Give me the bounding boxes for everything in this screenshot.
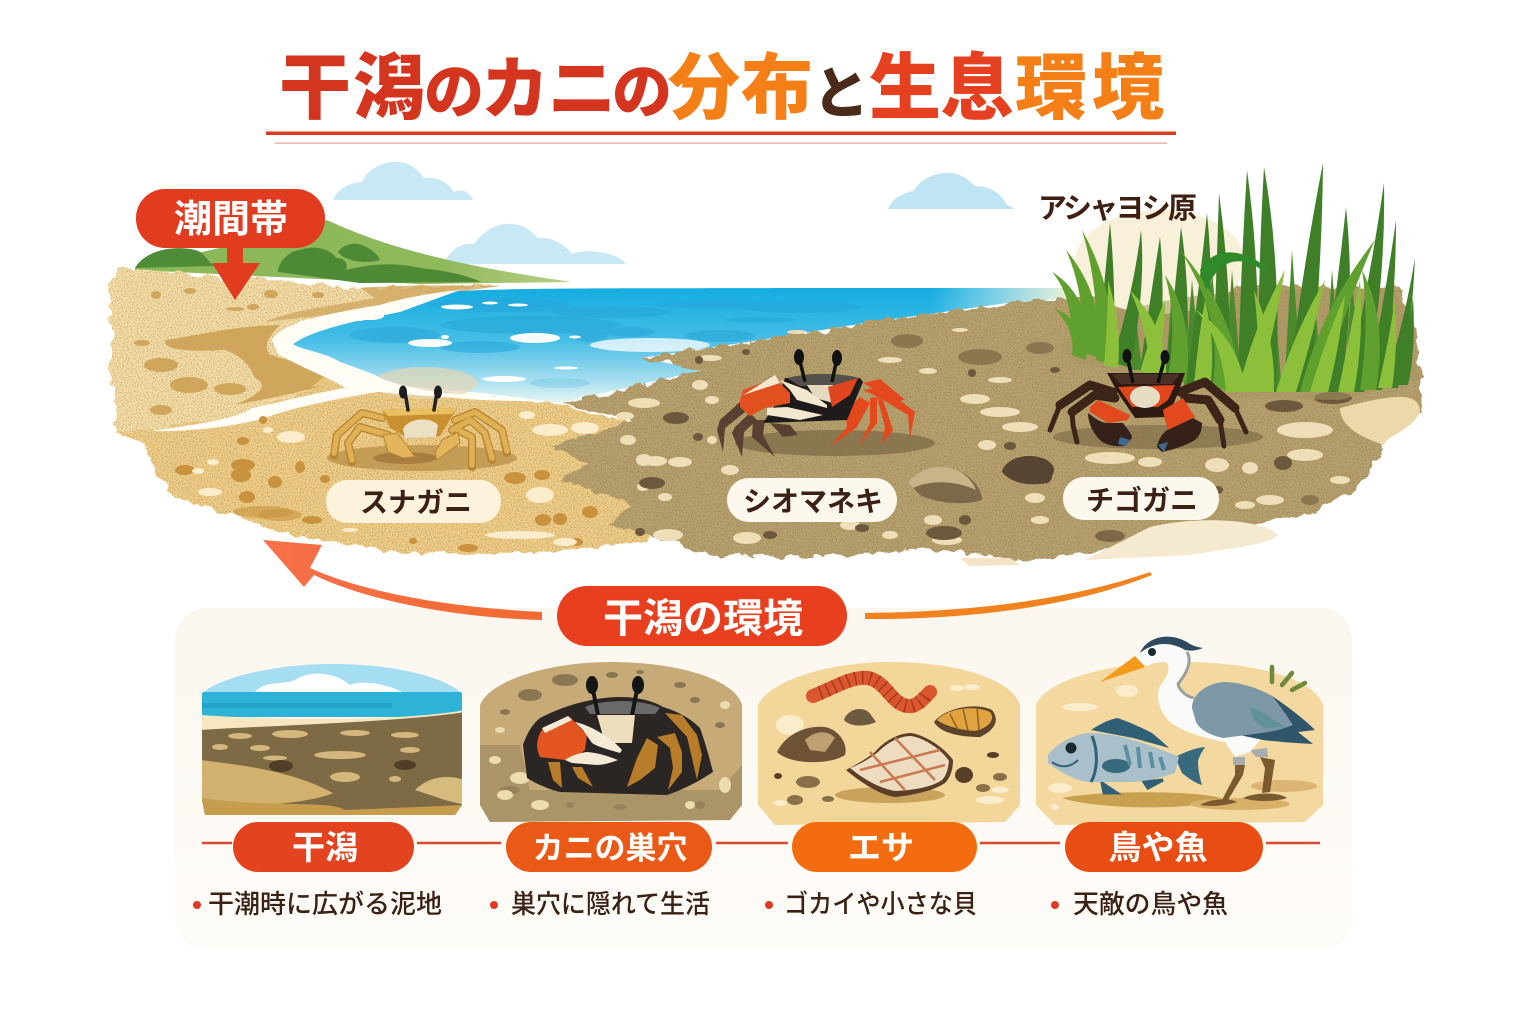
connecting line <box>202 842 1320 844</box>
title: 環境 <box>1015 49 1164 129</box>
title <box>266 49 1176 144</box>
white surf line <box>152 290 551 431</box>
label: シオマネキ <box>727 478 897 522</box>
cloud right <box>888 173 1015 209</box>
title: 生息 <box>869 49 1013 129</box>
thumbnail: food <box>756 660 1022 827</box>
pale sand under mud <box>1085 520 1278 560</box>
intertidal badge <box>136 189 325 300</box>
title: カニ <box>481 52 616 128</box>
pill: 鳥や魚 <box>1065 822 1263 872</box>
reed label: アシャヨシ原 <box>1038 193 1197 225</box>
icon: heron <box>1100 637 1315 806</box>
pill: 干潟: 干潟 <box>292 829 358 866</box>
title: 干潟 <box>279 49 425 129</box>
sand pebbles <box>175 411 599 552</box>
text: エサ description: ゴカイや小さな貝 <box>784 889 977 919</box>
cloud left <box>333 162 473 200</box>
intertidal badge: 潮間帯 <box>174 199 288 241</box>
label: スナガニ <box>326 480 501 523</box>
chigo crab <box>1050 349 1263 452</box>
pill: 鳥や魚: 鳥や魚 <box>1108 829 1208 866</box>
section heading <box>557 586 847 646</box>
pill: 干潟 <box>233 822 414 872</box>
title: 分布 <box>668 49 813 129</box>
pill: エサ <box>792 822 977 872</box>
beach sand <box>109 267 660 553</box>
panel: tidal flat environment <box>175 608 1352 950</box>
rock <box>1002 456 1052 484</box>
infographic canvas <box>108 50 1424 916</box>
title: の <box>612 59 672 126</box>
thumbnail: crab burrow <box>478 660 744 825</box>
wet sand patches <box>134 285 500 415</box>
title: の <box>424 59 484 126</box>
connector right <box>865 572 1152 619</box>
pill: カニの巣穴: カニの巣穴 <box>532 831 688 866</box>
label: チゴガニ: チゴガニ <box>1086 484 1198 516</box>
text: 干潟 description: 干潮時に広がる泥地 <box>208 889 442 919</box>
mud pebbles <box>616 328 1352 545</box>
reed grass <box>1052 163 1420 400</box>
label: チゴガニ <box>1063 477 1219 520</box>
section heading: 干潟の環境 <box>603 597 803 641</box>
thumbnail: tidal flat <box>200 660 465 815</box>
text: 鳥や魚 description: 天敵の鳥や魚 <box>1073 889 1228 919</box>
hill <box>135 220 572 284</box>
pill: エサ: エサ <box>848 829 914 866</box>
icon: fish <box>1048 718 1205 793</box>
pill: カニの巣穴 <box>506 822 712 872</box>
title: と <box>813 62 869 125</box>
cloud middle <box>445 224 626 264</box>
text: 巣穴 description: 巣穴に隠れて生活 <box>511 889 710 919</box>
clam shell <box>908 467 982 503</box>
label: スナガニ: スナガニ <box>360 487 472 518</box>
label: シオマネキ: シオマネキ <box>743 486 883 517</box>
ghost crab <box>327 386 517 471</box>
fiddler crab <box>717 349 935 457</box>
mudflat <box>551 285 1422 562</box>
thumbnail: birds and fish <box>1034 660 1325 827</box>
sea <box>291 288 1068 403</box>
arrow left <box>263 540 542 620</box>
